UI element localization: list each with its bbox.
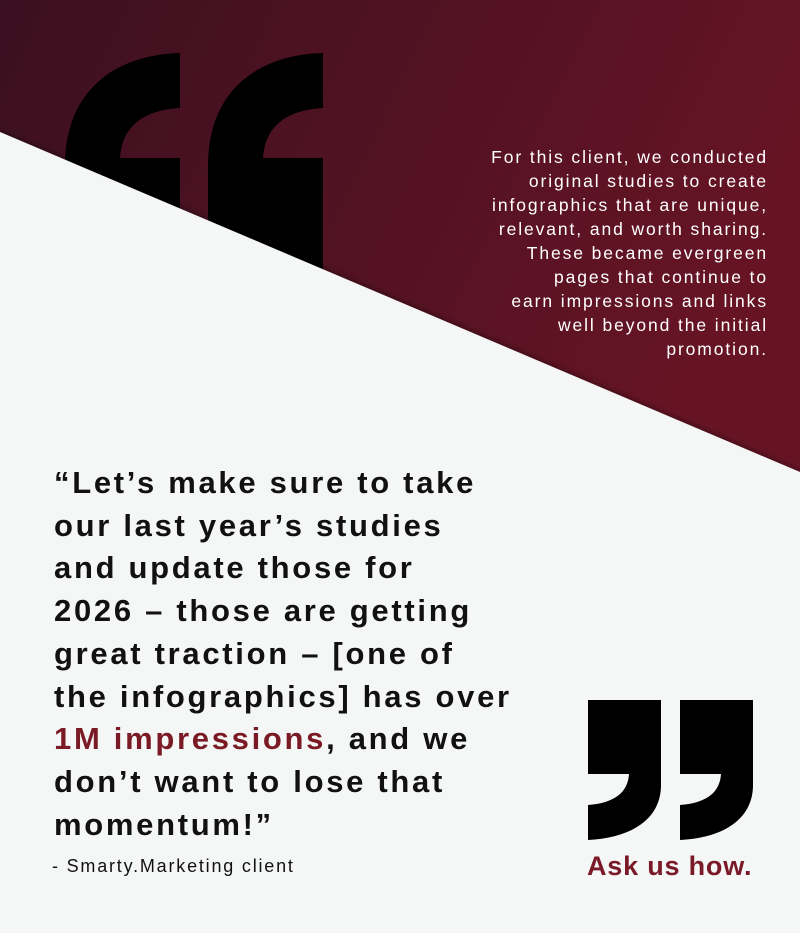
quote text: 2026 – those are getting: [54, 593, 472, 628]
quote text: 1M impressions, and we: [54, 721, 470, 756]
icon: opening quote: [65, 53, 323, 300]
text block: client description: For this client, we conducted: [491, 147, 768, 167]
quote text: momentum!”: [54, 807, 274, 842]
attribution: - Smarty.Marketing client: [52, 856, 295, 876]
quote text: “Let’s make sure to take: [54, 465, 476, 500]
text block: client description: infographics that are unique,: [492, 195, 768, 215]
text block: client description: well beyond the initial: [558, 315, 768, 335]
text block: client description: pages that continue to: [554, 267, 768, 287]
text block: client description: original studies to create: [529, 171, 768, 191]
quote text: the infographics] has over: [54, 679, 512, 714]
text block: client description: earn impressions and links: [511, 291, 768, 311]
text block: client description: relevant, and worth sharing.: [499, 219, 768, 239]
call to action: Ask us how.: [587, 851, 752, 881]
text block: client description: promotion.: [666, 339, 768, 359]
quote text: don’t want to lose that: [54, 764, 445, 799]
quote text: our last year’s studies: [54, 508, 443, 543]
quote text: and update those for: [54, 550, 415, 585]
text block: client description: These became evergreen: [527, 243, 768, 263]
quote text: great traction – [one of: [54, 636, 455, 671]
text block: client description: [491, 147, 768, 359]
quote text: [54, 465, 512, 842]
